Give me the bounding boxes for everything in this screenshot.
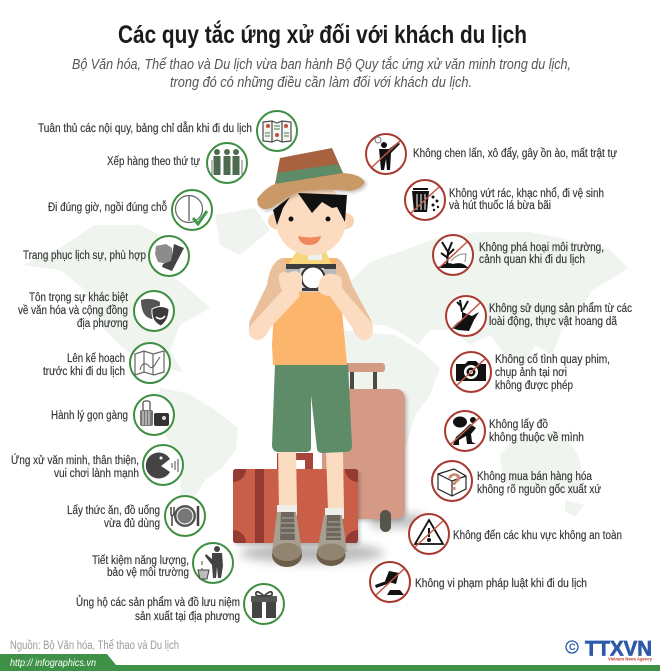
illustration: tourist with suitcases [233, 148, 425, 567]
text: Ủng hộ các sản phẩm và đồ lưu niệm [76, 596, 240, 609]
prohibition 7 [432, 461, 601, 501]
footer bar [0, 654, 660, 671]
icon: warning triangle [409, 514, 449, 554]
left column: rules to follow [11, 111, 297, 624]
hat [257, 148, 365, 209]
title: Các quy tắc ứng xử đối với khách du lịch [118, 19, 527, 49]
website: http:// infographics.vn [10, 657, 96, 669]
subtitle: Bộ Văn hóa, Thể thao và Du lịch vừa ban hành Bộ Quy tắc ứng xử văn minh trong du lịch, [72, 56, 571, 73]
rule 3 [48, 190, 212, 230]
prohibition 6 [445, 411, 584, 451]
text: Không vi phạm pháp luật khi đi du lịch [415, 578, 587, 590]
text: về văn hóa và cộng đồng [18, 305, 128, 317]
text: cảnh quan khi đi du lịch [479, 254, 585, 266]
rule 9 [67, 496, 205, 536]
text: Tuân thủ các nội quy, bảng chỉ dẫn khi đi du lịch [38, 122, 252, 135]
icon: brochure [257, 111, 297, 151]
text [495, 354, 610, 392]
icon: thief [445, 411, 485, 451]
suitcase shadows [240, 515, 425, 563]
text: Không sử dụng sản phẩm từ các [489, 303, 632, 315]
forearms [249, 280, 373, 340]
icon: gift [244, 584, 284, 624]
camera [286, 252, 336, 292]
text: Không chen lấn, xô đẩy, gây ồn ào, mất trật tự [413, 148, 617, 160]
rule 7 [51, 395, 174, 435]
icon: luggage [134, 395, 174, 435]
text: địa phương [77, 318, 128, 330]
legs [278, 450, 344, 510]
subtitle: trong đó có những điều cần làm đối với khách du lịch. [170, 74, 472, 91]
text: Tôn trọng sự khác biệt [29, 292, 129, 304]
icon: theatre masks [134, 291, 174, 331]
text: Đi đúng giờ, ngồi đúng chỗ [48, 201, 167, 214]
icon: speaking head [143, 445, 183, 485]
text: Xếp hàng theo thứ tự [107, 156, 200, 168]
rule 2 [107, 143, 247, 183]
world map [23, 208, 628, 516]
text [489, 419, 584, 444]
text: Lên kế hoạch [67, 353, 125, 365]
text [477, 471, 601, 496]
prohibition 5 [451, 352, 610, 392]
pink suitcase [322, 363, 405, 532]
text [11, 454, 139, 480]
icon: box with question mark: ? [447, 469, 462, 496]
rule 1 [38, 111, 297, 151]
right column: rules to avoid [366, 134, 632, 602]
icon: dead tree [433, 235, 473, 275]
rule 11 [76, 584, 284, 624]
text: Tiết kiệm năng lượng, [92, 555, 189, 567]
text [18, 292, 129, 330]
text: không rõ nguồn gốc xuất xứ [477, 484, 601, 496]
hands [279, 271, 342, 296]
text [67, 505, 160, 530]
icon: clock [172, 190, 212, 230]
logo: TTXVN: Vietnam News Agency [608, 656, 652, 662]
arms [249, 258, 373, 340]
rule 6 [43, 343, 170, 383]
prohibition 8 [409, 514, 622, 554]
icon: box with question mark [432, 461, 472, 501]
text [489, 303, 632, 328]
logo: TTXVN: TTXVN [585, 638, 652, 660]
icon: plate and cutlery [165, 496, 205, 536]
text: và hút thuốc lá bừa bãi [449, 200, 551, 212]
text: không được phép [495, 380, 573, 392]
text: vui chơi lành mạnh [54, 468, 139, 480]
prohibition 4 [446, 296, 632, 336]
text: Không vứt rác, khạc nhổ, đi vệ sinh [449, 188, 604, 200]
text: Không phá hoại môi trường, [479, 242, 604, 254]
icon: clothes [149, 236, 189, 276]
icon: deer [446, 296, 486, 336]
rule 8 [11, 445, 183, 485]
text: trước khi đi du lịch [43, 366, 125, 378]
text: Không cố tình quay phim, [495, 354, 610, 366]
icon: camera [451, 352, 491, 392]
prohibition 2 [405, 180, 604, 220]
text: chụp ảnh tại nơi [495, 367, 567, 379]
socks [277, 505, 344, 519]
text [449, 188, 604, 212]
text [76, 596, 240, 623]
rule 10 [92, 543, 233, 583]
icon: map [130, 343, 170, 383]
icon: person and bin [193, 543, 233, 583]
text: Lấy thức ăn, đồ uống [67, 505, 160, 517]
shorts [272, 364, 352, 453]
red suitcase [233, 453, 358, 543]
subtitle [72, 56, 571, 91]
text: Không đến các khu vực không an toàn [453, 530, 622, 542]
icon: queue [207, 143, 247, 183]
icon: noisy person [366, 134, 406, 174]
prohibition 1 [366, 134, 617, 174]
prohibition 9 [370, 562, 587, 602]
text: bảo vệ môi trường [107, 567, 189, 579]
icon: gavel [370, 562, 410, 602]
text [479, 242, 604, 266]
source: Nguồn: Bộ Văn hóa, Thể thao và Du lịch [10, 640, 179, 652]
text: loài động, thực vật hoang dã [489, 316, 618, 328]
logo: TTXVN: C [569, 642, 576, 652]
text: Không mua bán hàng hóa [477, 471, 593, 483]
shirt [272, 258, 347, 365]
icon: trash can [405, 180, 445, 220]
text: không thuộc về mình [489, 432, 584, 444]
boots [272, 512, 347, 567]
text: vừa đủ dùng [104, 518, 160, 530]
prohibition 3 [433, 235, 604, 275]
text: Không lấy đồ [489, 419, 548, 431]
rule 5 [18, 291, 174, 331]
text [43, 353, 125, 378]
text: Trang phục lịch sự, phù hợp [23, 250, 146, 262]
text: sản xuất tại địa phương [135, 611, 240, 623]
rule 4 [23, 236, 189, 276]
text [92, 555, 189, 579]
face [268, 182, 354, 256]
text: Ứng xử văn minh, thân thiện, [11, 454, 139, 467]
collar [288, 252, 332, 265]
text: Hành lý gọn gàng [51, 410, 128, 422]
